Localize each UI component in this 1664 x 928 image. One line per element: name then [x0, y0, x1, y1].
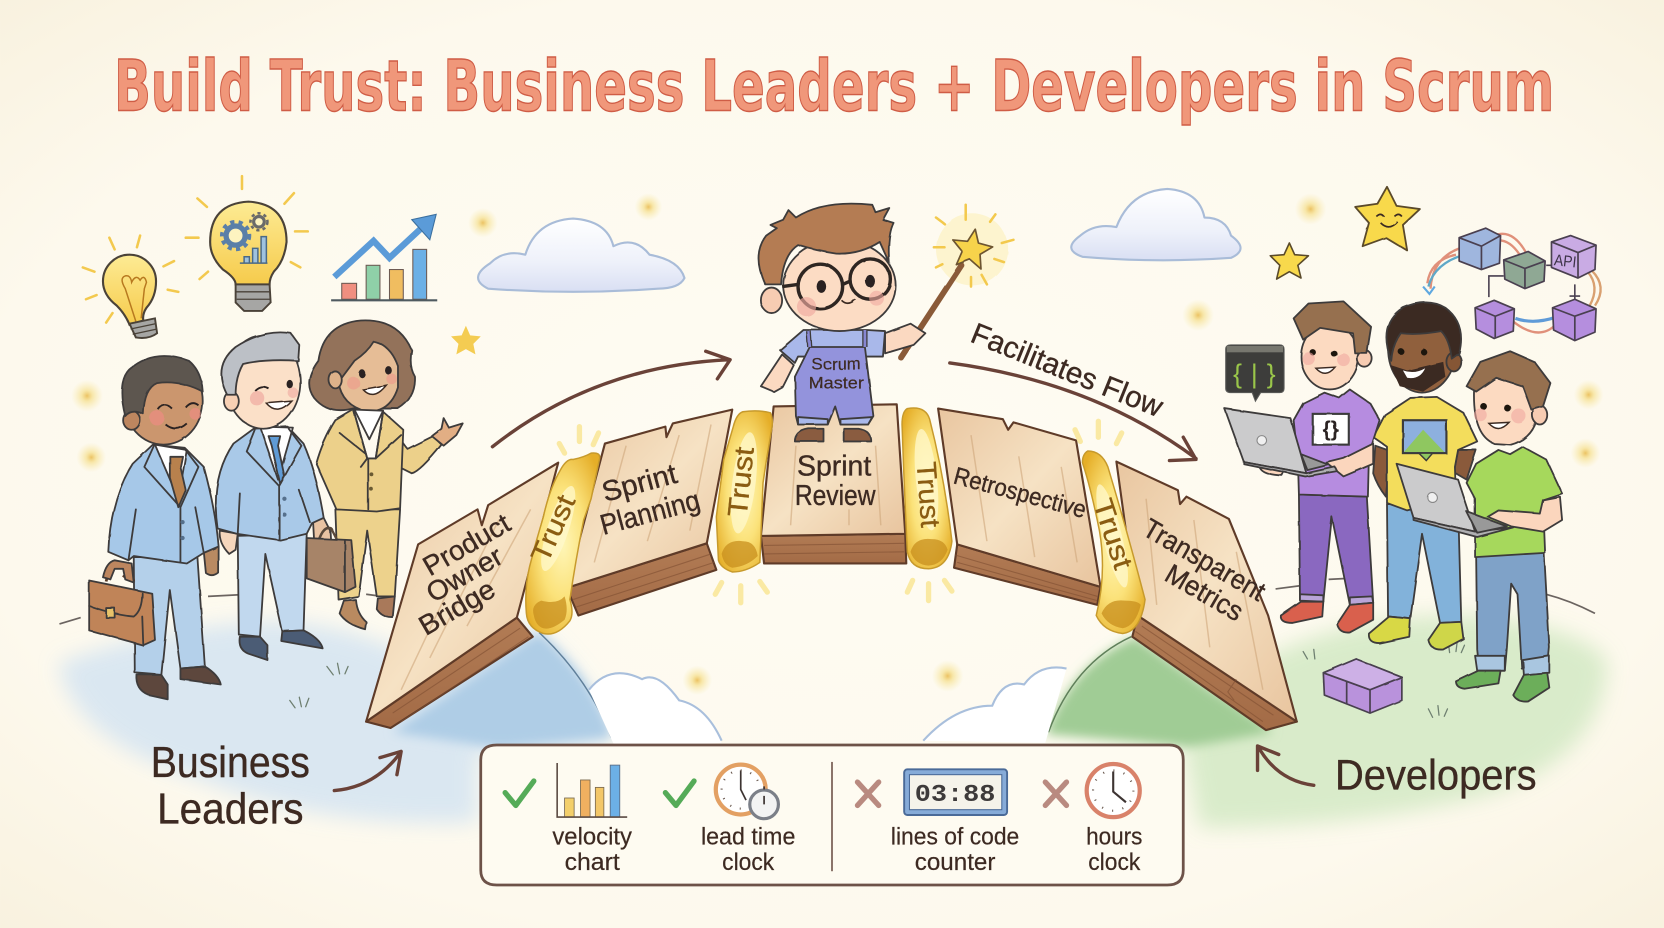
plank: Sprint Review	[761, 404, 906, 563]
arrow: developers to bridge	[1258, 746, 1314, 785]
cross mark 1	[857, 782, 879, 805]
plank: Sprint Review: Review	[795, 480, 876, 512]
lines of code counter icon: 03:88	[915, 782, 995, 809]
panel: good vs bad metrics	[481, 745, 1183, 885]
label: Business Leaders	[151, 739, 310, 833]
text: lead time clock	[701, 824, 795, 876]
text: velocity chart	[552, 824, 633, 876]
label: Business Leaders: Business	[151, 739, 310, 787]
label: Developers: Developers	[1335, 752, 1537, 799]
plank: Transparent Metrics	[1116, 462, 1297, 730]
business leader: grey haired man in blue suit	[216, 332, 356, 660]
cloud: upper right	[1071, 189, 1241, 260]
plank: Transparent Metrics: Transparent	[1138, 512, 1271, 607]
briefcase: grey brown	[307, 528, 356, 592]
laptop: green dev	[1397, 464, 1513, 537]
developer: front man in green shirt with laptop	[1397, 351, 1562, 702]
joint: gold trust 3	[902, 408, 952, 601]
joint: gold trust 1	[525, 427, 600, 634]
laptop: purple dev	[1225, 409, 1337, 476]
label: Business Leaders: Leaders	[157, 785, 304, 833]
velocity chart icon	[557, 763, 627, 817]
icon: code terminal bubble: {|}	[1233, 359, 1276, 389]
developer: middle man in yellow shirt	[1369, 302, 1477, 650]
joint: gold trust 4: Trust	[1087, 495, 1139, 573]
scrum master character: Scrum	[811, 354, 861, 373]
icon: connected cubes with API: API	[1553, 252, 1577, 271]
text: velocity chart: velocity	[552, 824, 633, 851]
icon: small smiling star	[1270, 243, 1308, 279]
check mark 1	[505, 781, 534, 805]
icon: growth bar chart with arrow	[331, 214, 437, 300]
ground: developer side	[1045, 578, 1608, 828]
arrow: business leaders to bridge	[334, 751, 401, 791]
text: lines of code counter	[891, 824, 1019, 876]
text: velocity chart: chart	[565, 849, 620, 876]
plank: Product Owner Bridge: Product	[417, 507, 516, 582]
text: hours clock: clock	[1088, 849, 1141, 876]
plank: Sprint Planning: Sprint	[598, 458, 681, 509]
plank: Sprint Planning: Planning	[597, 485, 703, 542]
check mark 2	[665, 781, 694, 805]
joint: gold trust 2: Trust	[722, 445, 760, 518]
icon: connected cubes with API	[1423, 228, 1601, 341]
briefcase: brown	[89, 560, 155, 645]
cross mark 2	[1045, 782, 1067, 805]
cloud: upper left	[478, 219, 684, 292]
text: hours clock: hours	[1086, 824, 1142, 851]
plank: Retrospective	[938, 409, 1100, 605]
icon: gold star	[451, 326, 481, 354]
magic wand with star	[901, 205, 1013, 358]
business leader: man with briefcase	[89, 356, 221, 699]
joint: gold trust 4	[1075, 421, 1145, 634]
text: lines of code counter: lines of code	[891, 824, 1019, 851]
developer: left man in purple shirt with laptop: {}	[1322, 418, 1339, 441]
bridge	[366, 404, 1297, 730]
lines of code counter icon	[904, 769, 1007, 815]
lead time clock icon	[716, 765, 778, 819]
scrum master character	[759, 204, 1013, 441]
joint: gold trust 1: Trust	[525, 490, 582, 567]
plank: Sprint Planning	[567, 410, 732, 615]
icon: code terminal bubble	[1226, 345, 1284, 401]
clouds under bridge	[589, 667, 1067, 748]
icon: purple blocks on grass	[1323, 659, 1402, 713]
joint: gold trust 2	[715, 411, 772, 603]
joint: gold trust 3: Trust	[911, 461, 946, 529]
plank: Product Owner Bridge: Bridge	[413, 573, 500, 641]
plank: Retrospective: Retrospective	[951, 463, 1089, 524]
text: lines of code counter: counter	[915, 849, 995, 876]
text: hours clock	[1086, 824, 1142, 876]
icon: gears and chart light bulb	[186, 176, 308, 311]
developer: left man in purple shirt with laptop	[1225, 301, 1380, 633]
icon: small light bulb	[83, 236, 178, 338]
icon: happy big star	[1355, 187, 1420, 250]
business leader: woman in tan suit	[309, 320, 463, 629]
label: Facilitates Flow: Facilitates Flow	[966, 317, 1168, 424]
text: lead time clock: lead time	[701, 824, 795, 851]
plank: Sprint Review: Sprint	[797, 450, 871, 482]
hours clock icon	[1087, 764, 1140, 817]
plank: Product Owner Bridge: Owner	[421, 540, 508, 608]
ground: business side	[58, 594, 613, 823]
plank: Transparent Metrics: Metrics	[1160, 558, 1249, 627]
scrum master character: Master	[809, 373, 864, 392]
plank: Product Owner Bridge	[366, 463, 558, 728]
arrow: facilitates flow	[950, 363, 1196, 461]
arrow: to scrum master	[492, 351, 730, 447]
text: lead time clock: clock	[722, 849, 775, 876]
sparkle glows	[71, 193, 1603, 695]
